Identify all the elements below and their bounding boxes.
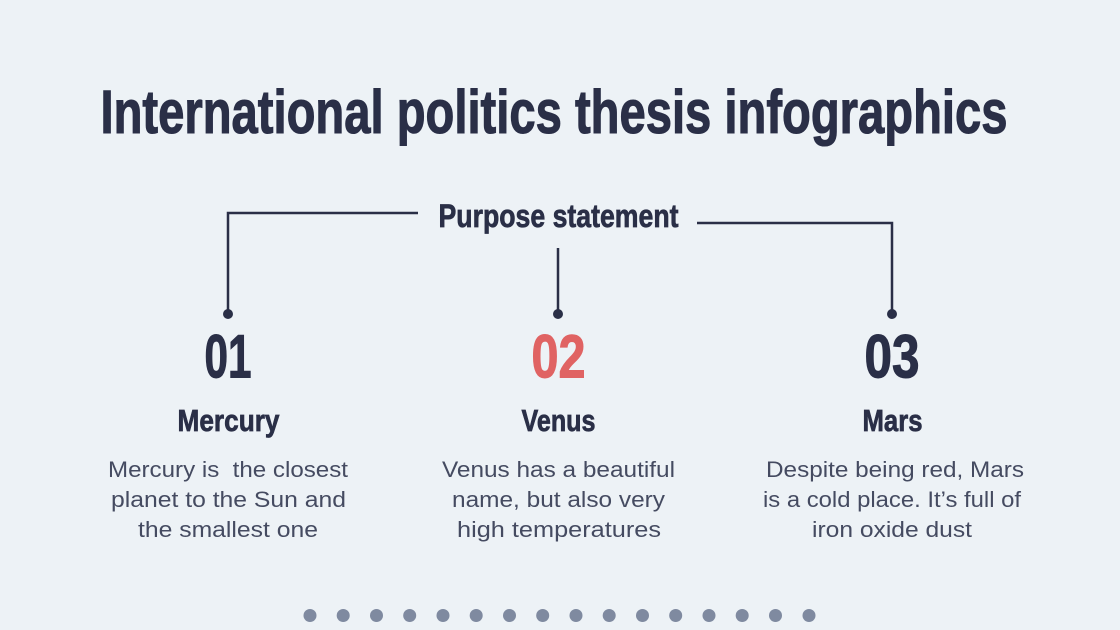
number 01: 01 [204, 322, 252, 390]
column: Mercury [108, 322, 348, 542]
column: Mars [763, 322, 1024, 542]
heading: Mars: Mars [862, 403, 922, 438]
text: Mars description: Despite being red, Mars [766, 457, 1024, 482]
text: Mars description: is a cold place. It’s full of [763, 487, 1022, 512]
heading: Venus: Venus [522, 403, 596, 438]
text: Mercury description: the smallest one [138, 517, 318, 542]
text: Mercury description: planet to the Sun and [111, 487, 346, 512]
text: Mars description: iron oxide dust [812, 517, 972, 542]
number 03: 03 [864, 322, 920, 390]
text: Venus description: high temperatures [457, 517, 661, 542]
number 02: 02 [532, 322, 586, 390]
dots row [304, 609, 816, 622]
text: Mercury description [108, 457, 348, 542]
column: Venus [442, 322, 675, 542]
heading: purpose statement: Purpose statement [438, 198, 679, 234]
text: Venus description: name, but also very [452, 487, 665, 512]
connector: left branch to 01 [223, 213, 418, 319]
text: Venus description [442, 457, 675, 542]
text: Mercury description: Mercury is the closest [108, 457, 348, 482]
connector: center branch to 02 [553, 248, 563, 319]
heading: Mercury: Mercury [178, 403, 280, 438]
connector: right branch to 03 [697, 223, 897, 319]
text: Mars description [763, 457, 1024, 542]
text: Venus description: Venus has a beautiful [442, 457, 675, 482]
